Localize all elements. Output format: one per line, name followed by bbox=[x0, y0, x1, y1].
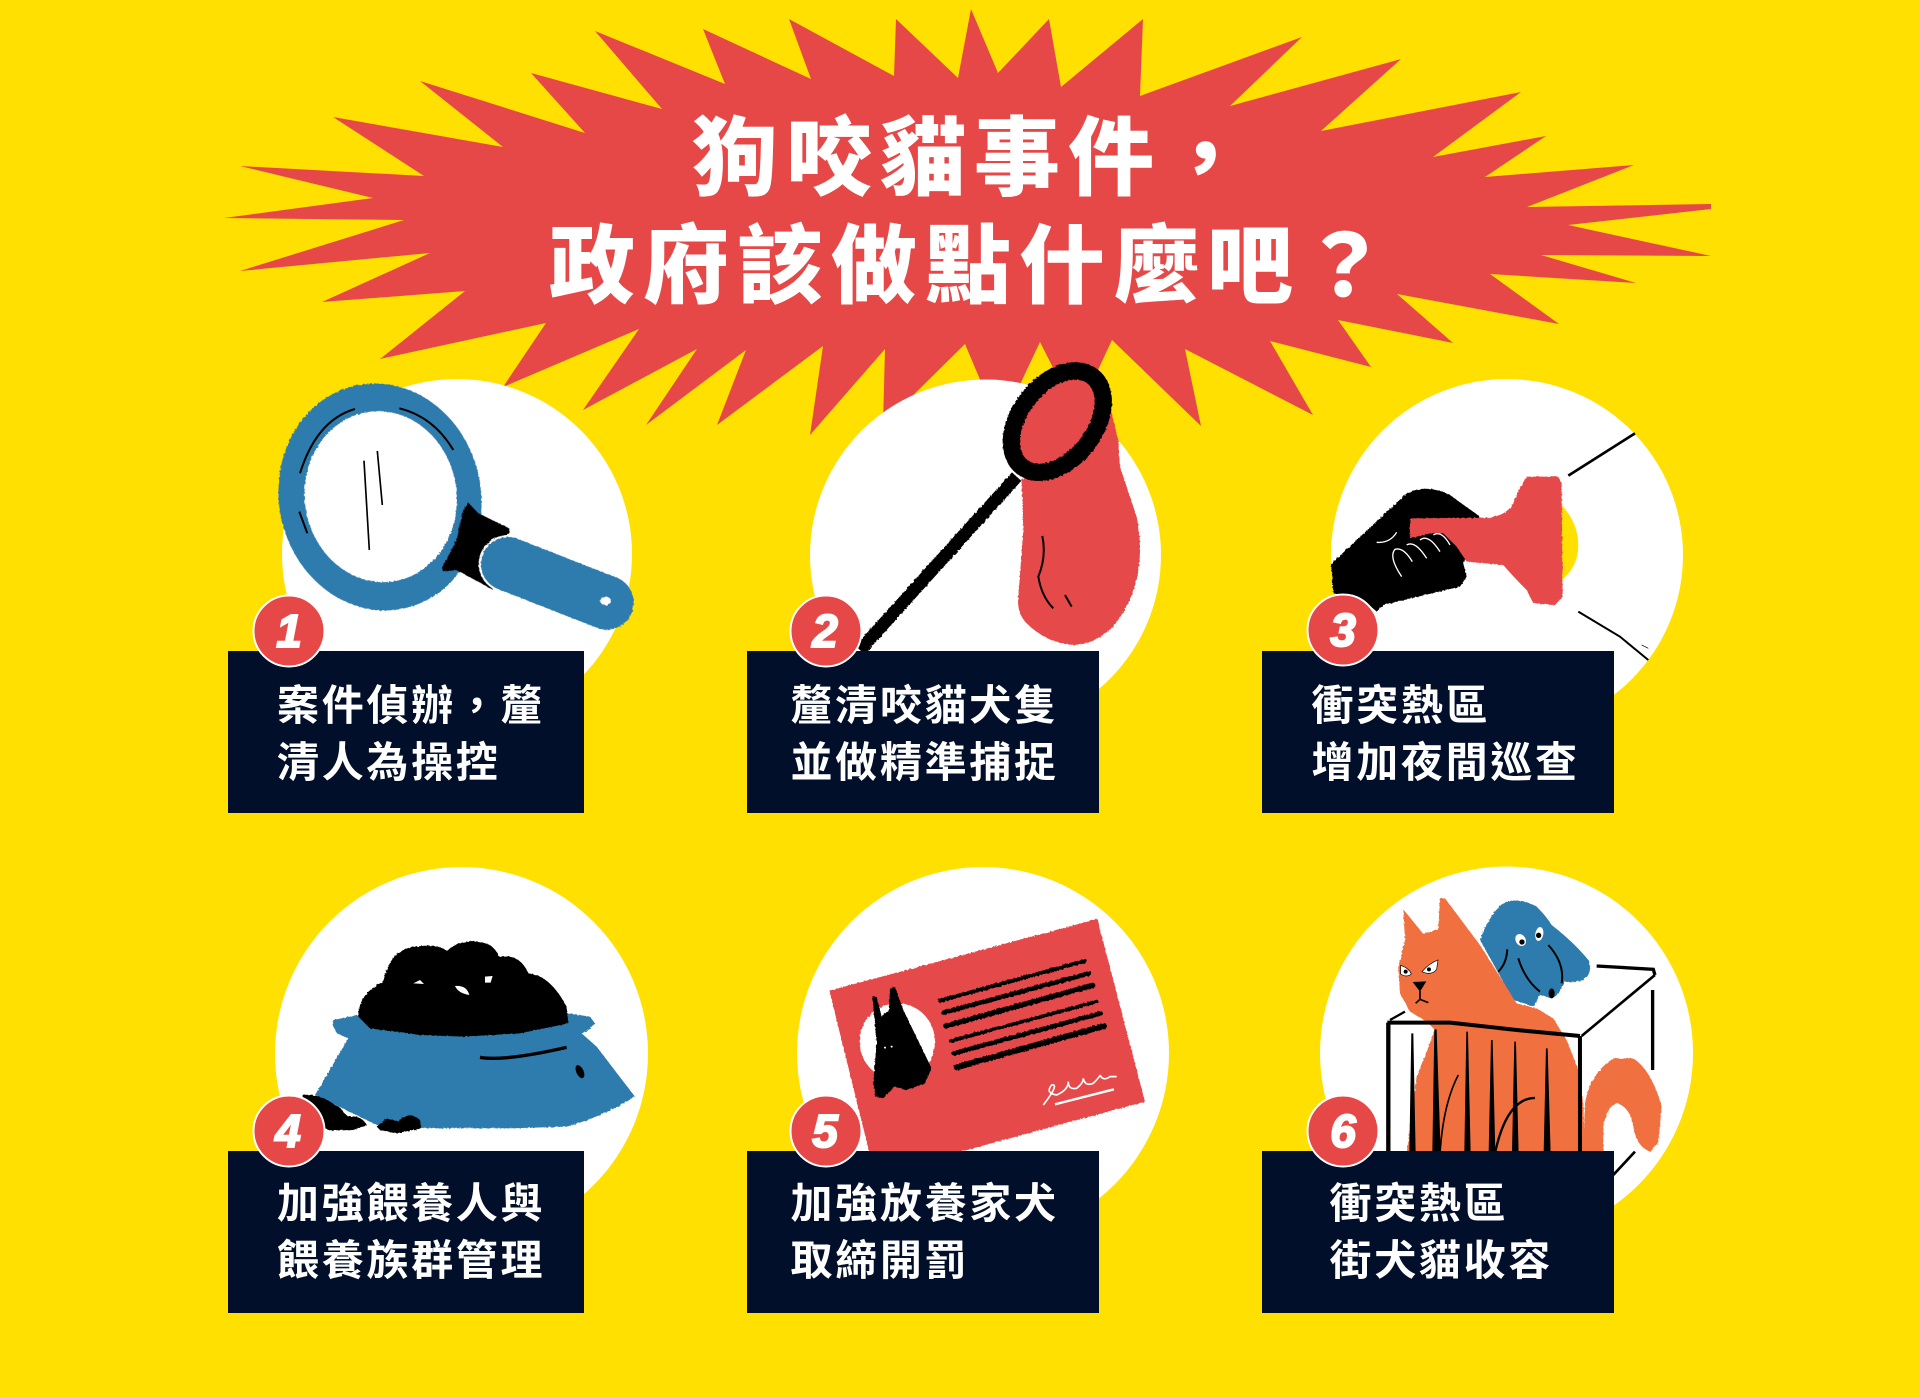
panel 1: case investigation bbox=[228, 364, 632, 813]
label box 5 bbox=[747, 1151, 1099, 1313]
number badge 5: 5 bbox=[812, 1105, 839, 1157]
label text 2: 釐清咬貓犬隻 bbox=[790, 672, 1059, 733]
number badge 3 bbox=[1308, 594, 1378, 666]
title: 政府該做點什麼吧？ bbox=[549, 196, 1395, 321]
starburst background bbox=[224, 9, 1711, 435]
panel 2: catching net bbox=[747, 354, 1161, 813]
icon: magnifying glass bbox=[258, 364, 611, 629]
icon: bowl of food bbox=[302, 941, 635, 1133]
number badge 6: 6 bbox=[1330, 1105, 1356, 1157]
label text 3: 衝突熱區 bbox=[1312, 672, 1490, 733]
label text 6 bbox=[1330, 1170, 1553, 1288]
title: 狗咬貓事件， bbox=[692, 88, 1256, 213]
icon: cat and dog in cage bbox=[1387, 898, 1662, 1175]
panel 4: feeding bowl bbox=[228, 867, 648, 1313]
label text 1: 案件偵辦，釐 bbox=[277, 672, 545, 733]
label box 3 bbox=[1262, 651, 1614, 813]
label text 3: 增加夜間巡查 bbox=[1312, 729, 1580, 790]
label text 1 bbox=[277, 672, 545, 790]
label text 4 bbox=[277, 1170, 545, 1288]
label text 3 bbox=[1312, 672, 1580, 790]
number badge 4: 4 bbox=[274, 1105, 301, 1157]
white circle 1 bbox=[282, 379, 632, 729]
label text 2: 並做精準捕捉 bbox=[790, 729, 1059, 790]
number badge 6 bbox=[1308, 1096, 1378, 1166]
number badge 2: 2 bbox=[811, 605, 838, 657]
label text 5 bbox=[790, 1170, 1059, 1288]
label text 4: 餵養族群管理 bbox=[277, 1227, 545, 1288]
label text 4: 加強餵養人與 bbox=[277, 1170, 545, 1231]
label box 1 bbox=[228, 651, 584, 813]
label text 5: 加強放養家犬 bbox=[790, 1170, 1059, 1231]
white circle 3 bbox=[1331, 379, 1683, 731]
panel 3: patrol stamp bbox=[1262, 379, 1683, 813]
icon: hand with stamp bbox=[1331, 433, 1648, 660]
number badge 4 bbox=[254, 1096, 324, 1166]
white circle 2 bbox=[810, 380, 1161, 730]
label text 5: 取締開罰 bbox=[790, 1227, 969, 1288]
number badge 5 bbox=[790, 1096, 862, 1166]
number badge 1 bbox=[254, 596, 324, 666]
white circle 4 bbox=[275, 867, 648, 1240]
label text 6: 街犬貓收容 bbox=[1330, 1227, 1553, 1288]
label box 2 bbox=[747, 651, 1099, 813]
label text 2 bbox=[790, 672, 1059, 790]
panel 5: licence card bbox=[747, 867, 1169, 1313]
number badge 2 bbox=[790, 596, 862, 666]
title bbox=[549, 88, 1395, 321]
icon: capture net bbox=[860, 354, 1140, 650]
label box 4 bbox=[228, 1151, 584, 1313]
white circle 6 bbox=[1320, 866, 1693, 1240]
white circle 5 bbox=[797, 867, 1169, 1239]
label box 6 bbox=[1262, 1151, 1614, 1313]
label text 1: 清人為操控 bbox=[277, 729, 501, 790]
panel 6: cat and dog shelter bbox=[1262, 866, 1693, 1313]
number badge 3: 3 bbox=[1330, 604, 1356, 656]
number badge 1: 1 bbox=[276, 605, 302, 657]
icon: pet licence card bbox=[829, 919, 1145, 1175]
label text 6: 衝突熱區 bbox=[1330, 1170, 1508, 1231]
